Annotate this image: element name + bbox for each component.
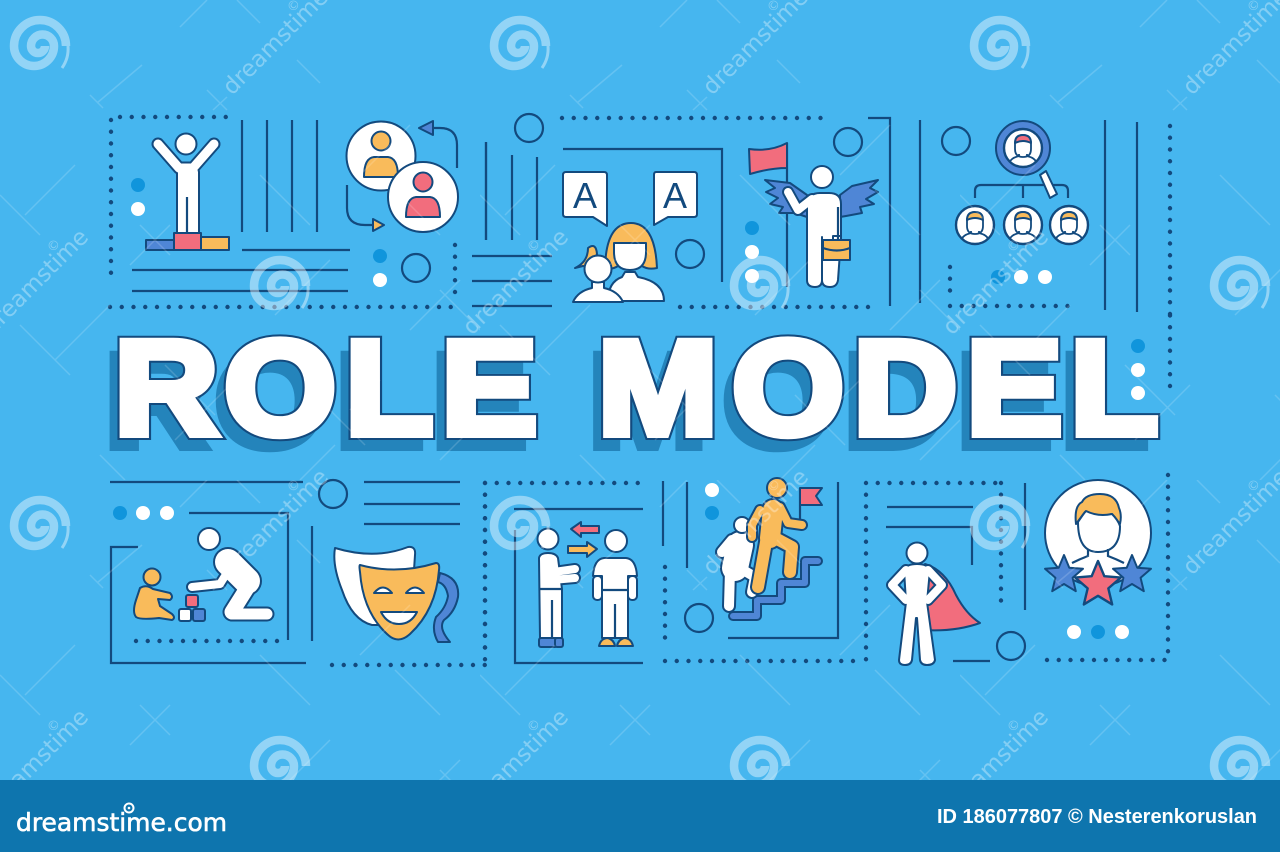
watermark layer: © xyxy=(1004,236,1024,256)
panel: bottom-left play and masks decoration xyxy=(110,480,486,665)
panel: top-left podium and swap decoration xyxy=(110,117,486,307)
panel: bottom-center stairs decoration xyxy=(665,478,854,661)
icon: leader climbing stairs with follower xyxy=(722,478,822,616)
icon: two people talking xyxy=(538,522,637,647)
footer logo: dreamstime.com xyxy=(16,808,227,837)
icon: person with three stars xyxy=(1045,480,1151,604)
icon: winner on podium xyxy=(146,134,229,250)
panel: top-center translation and angel decoration xyxy=(472,114,890,307)
watermark layer: © xyxy=(1004,716,1024,736)
watermark layer: dreamstime xyxy=(458,224,574,340)
watermark layer: dreamstime xyxy=(218,464,334,580)
panel: bottom-right superhero decoration xyxy=(866,483,1025,665)
panel: top-right hierarchy decoration xyxy=(920,120,1170,316)
dots xyxy=(705,483,719,520)
icon: language speech bubbles: A xyxy=(573,175,597,216)
watermark layer: dreamstime xyxy=(938,224,1054,340)
logo spiral xyxy=(124,804,134,812)
icon: superhero xyxy=(892,542,980,665)
watermark layer: © xyxy=(1244,476,1264,496)
icon: angel with flag and briefcase xyxy=(749,143,878,287)
footer credit: ID 186077807 © Nesterenkoruslan xyxy=(937,805,1257,828)
icon: swapping user circles xyxy=(346,121,458,232)
watermark layer: dreamstime xyxy=(938,704,1054,820)
dots xyxy=(373,249,387,287)
dots xyxy=(991,270,1052,284)
icon: theatre masks xyxy=(334,547,458,642)
icon: adult playing blocks with child xyxy=(134,528,267,621)
icon: language speech bubbles: A xyxy=(663,175,687,216)
title side decoration xyxy=(1131,316,1170,400)
watermark layer: © xyxy=(524,716,544,736)
title shadow: ROLE MODEL xyxy=(104,327,1148,476)
dots xyxy=(745,221,759,283)
dots xyxy=(113,506,174,520)
watermark layer: dreamstime xyxy=(458,704,574,820)
title outline: ROLE MODEL xyxy=(114,314,1158,463)
panel: bottom-right rated person xyxy=(1045,475,1168,660)
icon: woman and child xyxy=(573,223,664,302)
title: ROLE MODEL xyxy=(114,314,1158,463)
dots xyxy=(131,178,145,216)
watermark layer: © xyxy=(44,716,64,736)
panel: bottom-center conversation decoration xyxy=(485,481,663,665)
watermark layer: © xyxy=(284,476,304,496)
icon: language speech bubbles xyxy=(563,172,697,226)
footer bar xyxy=(0,780,1280,852)
watermark layer: dreamstime xyxy=(698,464,814,580)
dots xyxy=(1067,625,1129,639)
watermark layer: © xyxy=(44,236,64,256)
icon: search for candidate in hierarchy xyxy=(956,121,1088,244)
watermark layer: © xyxy=(764,476,784,496)
watermark layer: © xyxy=(524,236,544,256)
